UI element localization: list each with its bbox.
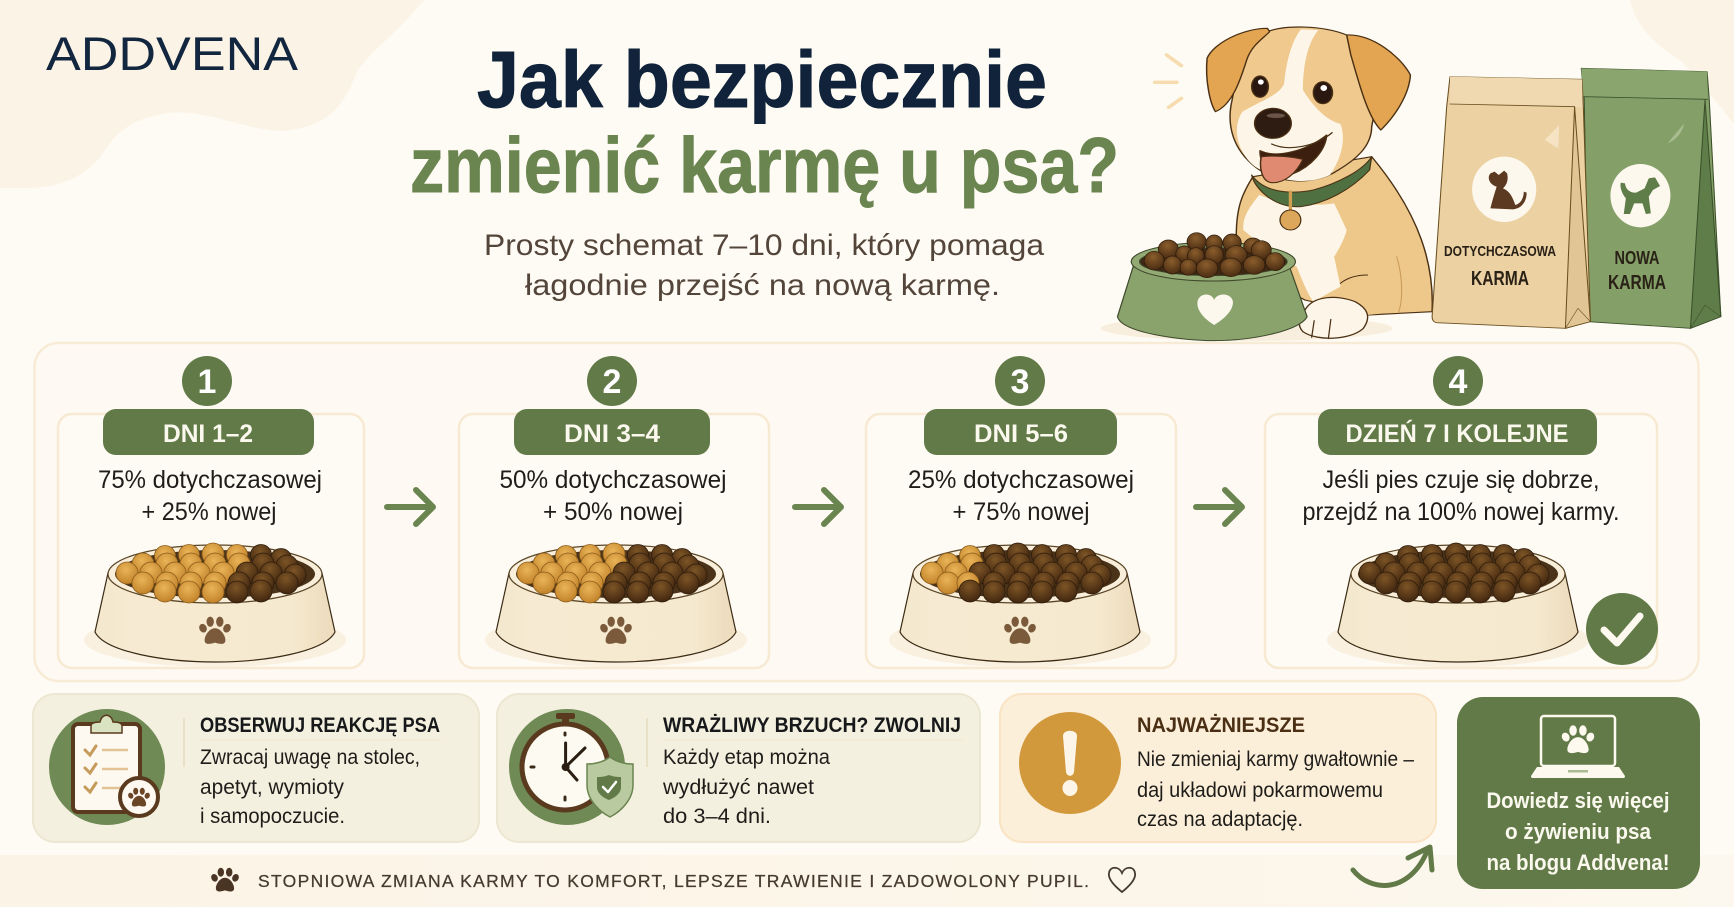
step 4 number: 4	[1449, 363, 1468, 401]
dog	[1207, 27, 1432, 339]
step 4 text	[1302, 466, 1620, 526]
step 4 card	[1265, 414, 1657, 668]
curved arrow	[1353, 847, 1432, 885]
step 4 pill	[1318, 409, 1597, 455]
step 1 pill	[103, 409, 314, 455]
step 3 number	[995, 356, 1045, 406]
cta text	[1486, 788, 1670, 875]
body	[200, 746, 420, 828]
step 1 text: + 25% nowej	[142, 498, 276, 526]
step 3 text: 25% dotychczasowej	[908, 466, 1134, 494]
step 3 text: + 75% nowej	[952, 498, 1090, 526]
title	[410, 35, 1119, 209]
step 1 number	[182, 356, 232, 406]
step 2 text	[500, 466, 726, 526]
body: daj układowi pokarmowemu	[1137, 779, 1383, 802]
arrow 2	[795, 490, 841, 524]
bag labels	[1444, 243, 1666, 294]
body: czas na adaptację.	[1137, 808, 1303, 831]
step 2 bowl	[485, 543, 747, 667]
step 2	[459, 356, 769, 668]
step 2 number	[587, 356, 637, 406]
step 2 text: 50% dotychczasowej	[500, 466, 726, 494]
step 4 bowl	[1327, 543, 1589, 667]
decorative blob: top left	[0, 0, 424, 188]
icon: laptop	[1531, 716, 1625, 778]
step 1 text	[98, 466, 322, 526]
step 4 text: przejdź na 100% nowej karmy.	[1302, 498, 1620, 526]
panel frame	[34, 343, 1698, 681]
step 3	[866, 356, 1176, 668]
heart on bowl	[1197, 295, 1233, 325]
illustration: dog with bowl and food bags	[1101, 27, 1721, 341]
step 1 pill: DNI 1–2	[163, 420, 253, 448]
tip card: observe	[33, 694, 479, 842]
body: wydłużyć nawet	[662, 776, 814, 799]
cta text: o żywieniu psa	[1505, 819, 1652, 844]
arrow 1	[387, 490, 433, 524]
subtitle: Prosty schemat 7–10 dni, który pomaga	[484, 229, 1044, 262]
step 1 card	[58, 414, 364, 668]
cta text: na blogu Addvena!	[1486, 850, 1670, 875]
divider	[183, 718, 185, 767]
body: Nie zmieniaj karmy gwałtownie –	[1137, 748, 1414, 771]
step 3 card	[866, 414, 1176, 668]
title: OBSERWUJ REAKCJĘ PSA	[200, 714, 440, 737]
subtitle	[484, 229, 1044, 302]
band text: STOPNIOWA ZMIANA KARMY TO KOMFORT, LEPSZE TRAWIENIE I ZADOWOLONY PUPIL.	[258, 871, 1089, 891]
bag labels: KARMA	[1471, 268, 1529, 290]
body	[1137, 748, 1414, 831]
bag labels: DOTYCHCZASOWA	[1444, 243, 1556, 260]
step 2 text: + 50% nowej	[543, 498, 683, 526]
kibble in green bowl	[1144, 233, 1285, 278]
sparkle lines	[1155, 55, 1181, 107]
body: Każdy etap można	[663, 746, 830, 769]
step 2 pill	[514, 409, 710, 455]
decorative blob: top right	[1630, 0, 1734, 124]
panel: feeding schedule	[34, 343, 1698, 681]
icon: heart	[1109, 868, 1135, 892]
tip card: most important	[1000, 694, 1436, 842]
check badge	[1586, 593, 1658, 665]
title: WRAŻLIWY BRZUCH? ZWOLNIJ	[663, 714, 961, 737]
green bag	[1581, 68, 1721, 328]
title: NAJWAŻNIEJSZE	[1137, 714, 1305, 737]
step 3 pill: DNI 5–6	[974, 420, 1068, 448]
title: zmienić karmę u psa?	[410, 121, 1119, 209]
green bowl	[1118, 242, 1307, 341]
beige bag	[1432, 77, 1590, 328]
subtitle: łagodnie przejść na nową karmę.	[525, 269, 1000, 302]
body	[662, 746, 830, 828]
step 2 card	[459, 414, 769, 668]
step 1 text: 75% dotychczasowej	[98, 466, 322, 494]
body: do 3–4 dni.	[663, 805, 771, 828]
step 3 text	[908, 466, 1134, 526]
logo: ADDVENA	[46, 27, 299, 80]
step 1 bowl	[84, 543, 346, 667]
body: apetyt, wymioty	[200, 776, 344, 799]
step 3 pill	[924, 409, 1117, 455]
step 1	[58, 356, 364, 668]
cta text: Dowiedz się więcej	[1486, 788, 1670, 813]
bottom band	[0, 855, 1734, 907]
step 4 text: Jeśli pies czuje się dobrze,	[1322, 466, 1600, 494]
step 1 number: 1	[198, 363, 216, 401]
divider	[646, 718, 648, 767]
tip card: sensitive stomach	[497, 694, 980, 842]
dog, bowl and bag drawings	[1101, 27, 1721, 341]
step 2 number: 2	[603, 363, 621, 401]
call to action box	[1457, 697, 1700, 889]
icon: paw	[210, 868, 240, 891]
ground shadow	[1101, 316, 1393, 341]
body: Zwracaj uwagę na stolec,	[200, 746, 420, 769]
body: i samopoczucie.	[200, 805, 345, 828]
icon: clipboard	[49, 709, 165, 825]
bag labels: NOWA	[1614, 248, 1660, 268]
step 3 bowl	[889, 543, 1151, 667]
icon: exclamation	[1019, 712, 1121, 814]
bag labels: KARMA	[1608, 272, 1666, 294]
icon: clock with shield	[509, 709, 633, 825]
step 4 number	[1433, 356, 1483, 406]
step 4	[1265, 356, 1658, 668]
arrow 3	[1196, 490, 1242, 524]
step 3 number: 3	[1011, 363, 1029, 401]
step 2 pill: DNI 3–4	[564, 420, 660, 448]
title: Jak bezpiecznie	[477, 35, 1047, 124]
step 4 pill: DZIEŃ 7 I KOLEJNE	[1346, 419, 1568, 448]
